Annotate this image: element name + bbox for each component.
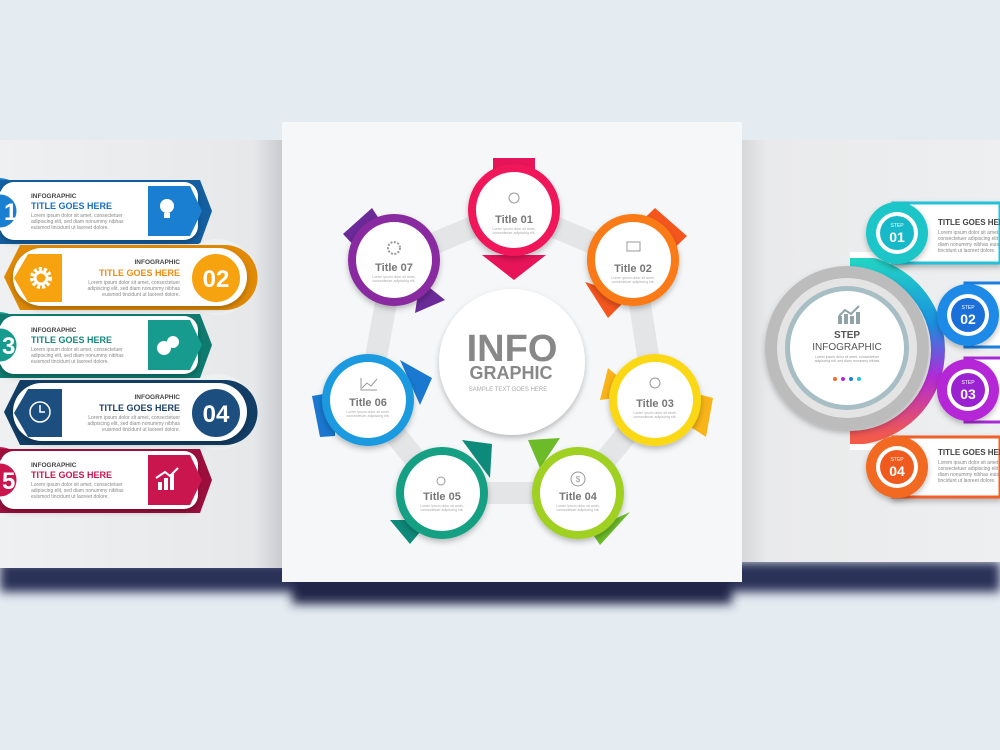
node: Title 03 [600, 354, 713, 446]
node: Title 06: consectetuer adipiscing elit. [346, 414, 390, 418]
row 3: adipiscing elit, sed diam nonummy nibhas [31, 353, 124, 359]
node: Title 07: Title 07 [375, 262, 413, 274]
row 3 [0, 312, 212, 378]
row 5: TITLE GOES HERE [31, 470, 112, 480]
row 4: Lorem ipsum dolor sit amet, consectetuer [88, 415, 180, 421]
node: Title 01: consectetuer adipiscing elit. [492, 231, 536, 235]
step bar 01: Lorem ipsum dolor sit amet [938, 230, 999, 236]
step bar 04: tincidunt ut laoreet dolore. [938, 478, 996, 484]
node: Title 01: Lorem ipsum dolor sit amet, [492, 227, 536, 231]
row 1: 1 [4, 199, 17, 226]
row 5: Lorem ipsum dolor sit amet, consectetuer [31, 482, 123, 488]
node: Title 03: Title 03 [636, 398, 674, 410]
node: Title 06 [312, 354, 432, 446]
icon: bulb [160, 199, 174, 218]
step 04 circle: 04 [889, 463, 905, 479]
node: Title 04: Title 04 [559, 491, 598, 503]
row 3: Lorem ipsum dolor sit amet, consectetuer [31, 347, 123, 353]
row 3: euismod tincidunt ut laoreet dolore. [31, 359, 109, 365]
node: Title 02 [585, 208, 687, 318]
node: Title 06: Lorem ipsum dolor sit amet, [346, 410, 390, 414]
node: Title 02: consectetuer adipiscing elit. [612, 280, 655, 284]
row 4: 04 [203, 401, 230, 428]
node: Title 02: Lorem ipsum dolor sit amet, [611, 276, 655, 280]
step bar 01 [893, 203, 1000, 263]
node: Title 01 [468, 158, 560, 280]
row 5: adipiscing elit, sed diam nonummy nibhas [31, 488, 124, 494]
row 2: 02 [203, 266, 229, 293]
shadows under panels [0, 562, 1000, 604]
step 01 circle: STEP [890, 223, 904, 229]
row 2: euismod tincidunt ut laoreet dolore. [102, 292, 180, 298]
step 04 circle: STEP [890, 457, 904, 463]
central step circle: STEP [834, 330, 860, 341]
node: Title 06: Title 06 [349, 397, 387, 409]
row 5: euismod tincidunt ut laoreet dolore. [31, 494, 109, 500]
node: Title 07 [343, 208, 445, 313]
central step circle [765, 266, 929, 430]
panel: center circular infographic [282, 122, 742, 582]
step 01 circle [866, 202, 928, 264]
central step circle: adipiscing elit, sed diam nonummy nibhas [815, 359, 880, 363]
row 2: adipiscing elit, sed diam nonummy nibhas [87, 286, 180, 292]
node: Title 04: Lorem ipsum dolor sit amet, [556, 504, 600, 508]
icon: chat [157, 336, 179, 355]
node: Title 07: Lorem ipsum dolor sit amet, [372, 275, 416, 279]
step 04 circle [866, 436, 928, 498]
row 5: INFOGRAPHIC [31, 462, 77, 469]
step 02 circle [937, 284, 999, 346]
step 02 circle: 02 [960, 311, 976, 327]
center circle: SAMPLE TEXT GOES HERE [469, 387, 547, 393]
step bars 02/03 [965, 283, 1000, 422]
center circle [439, 289, 585, 435]
row 3: 3 [2, 333, 15, 360]
row 4: adipiscing elit, sed diam nonummy nibhas [87, 421, 180, 427]
node: Title 02: Title 02 [614, 263, 652, 275]
node: Title 04 [528, 438, 630, 545]
row 3: INFOGRAPHIC [31, 327, 77, 334]
step 02 circle: STEP [961, 305, 975, 311]
row 2 [4, 239, 258, 315]
step 03 circle: 03 [960, 386, 976, 402]
node: Title 05: consectetuer adipiscing elit. [420, 508, 464, 512]
step 03 circle: STEP [961, 380, 975, 386]
panel: left list infographic [0, 140, 282, 568]
row 1: Lorem ipsum dolor sit amet, consectetuer [31, 213, 123, 219]
row 1: euismod tincidunt ut laoreet dolore. [31, 225, 109, 231]
node: Title 03: consectetuer adipiscing elit. [634, 415, 677, 419]
row 1: TITLE GOES HERE [31, 201, 112, 211]
node: Title 01: Title 01 [495, 214, 533, 226]
gradient arc [850, 262, 938, 438]
row 2: Lorem ipsum dolor sit amet, consectetuer [88, 280, 180, 286]
step bar 04 [893, 437, 1000, 497]
row 3: TITLE GOES HERE [31, 335, 112, 345]
step bar 04: consectetuer adipiscing elit [938, 466, 999, 472]
step bar 04: Lorem ipsum dolor sit amet [938, 460, 999, 466]
step bar 01: consectetuer adipiscing elit [938, 236, 999, 242]
central step circle: Lorem ipsum dolor sit amet, consectetuer [815, 355, 880, 359]
node: Title 04: consectetuer adipiscing elit. [556, 508, 600, 512]
row 5 [0, 447, 212, 513]
row 1 [0, 178, 212, 244]
node: Title 04: $ [576, 475, 581, 484]
node: Title 05 [390, 440, 492, 544]
row 4: TITLE GOES HERE [99, 403, 180, 413]
node: Title 03: Lorem ipsum dolor sit amet, [633, 411, 677, 415]
icon: clock [30, 402, 50, 422]
step bar 01: tincidunt ut laoreet dolore. [938, 248, 996, 254]
panel: right step infographic [742, 140, 1000, 562]
heptagon connector [368, 210, 655, 493]
row 4: euismod tincidunt ut laoreet dolore. [102, 427, 180, 433]
node: Title 05: Title 05 [423, 491, 461, 503]
center circle: INFO [467, 328, 557, 370]
row 4 [4, 374, 258, 450]
center circle: GRAPHIC [469, 363, 553, 383]
row 1: INFOGRAPHIC [31, 193, 77, 200]
node: Title 05: Lorem ipsum dolor sit amet, [420, 504, 464, 508]
central step circle: INFOGRAPHIC [812, 342, 882, 353]
row 5: 5 [2, 468, 15, 495]
icon: gear [32, 269, 50, 287]
row 1: adipiscing elit, sed diam nonummy nibhas [31, 219, 124, 225]
step 03 circle [937, 359, 999, 421]
row 4: INFOGRAPHIC [134, 394, 180, 401]
row 2: INFOGRAPHIC [134, 259, 180, 266]
icon: chart [156, 468, 178, 490]
step 01 circle: 01 [889, 229, 905, 245]
row 2: TITLE GOES HERE [99, 268, 180, 278]
node: Title 07: consectetuer adipiscing elit. [372, 279, 416, 283]
